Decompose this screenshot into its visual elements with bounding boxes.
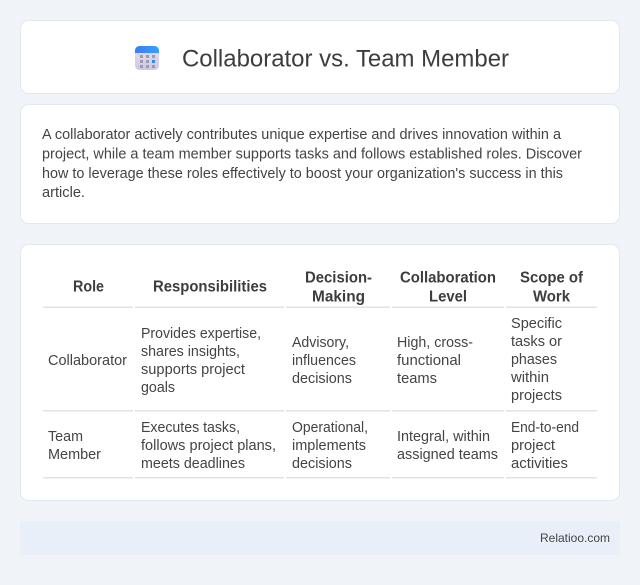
table row: team member: implements [292,438,366,454]
table row: collaborator: within [510,370,549,386]
text block: introduction paragraph: how to leverage these roles effectively to boost your organization's success in this [42,166,563,182]
table row: team member: End-to-end [511,420,579,436]
table header row: Scope of [520,270,584,286]
panel: comparison table [20,244,620,500]
title: Collaborator vs. Team Member [182,46,509,72]
table header row: Collaboration [400,270,496,286]
table row: collaborator: phases [511,352,557,368]
table row: team member: Member [48,447,101,463]
table row: collaborator: goals [141,380,175,396]
table row: collaborator: Collaborator [48,353,127,369]
footer bar [20,521,620,555]
table row: team member: meets deadlines [141,456,245,472]
table row: collaborator: tasks or [511,334,562,350]
table header row: Work [533,288,570,306]
table header row: Level [429,288,467,306]
table row: collaborator: teams [397,371,437,387]
table row: collaborator: functional [397,353,461,369]
icon: calendar [135,46,159,70]
table row: team member: follows project plans, [141,438,276,454]
table row: collaborator: influences [292,353,356,369]
table row: collaborator: Advisory, [292,335,349,351]
table row: collaborator: supports project [141,362,245,378]
table row: collaborator [48,316,562,404]
table header row: Responsibilities [153,278,267,296]
text block: introduction paragraph: article. [42,185,85,201]
table row: collaborator: High, cross- [397,335,473,351]
table row: team member: Executes tasks, [141,420,240,436]
table header row: Role [73,278,104,296]
table header row: Decision- [305,270,372,286]
panel: introduction [20,104,620,224]
table header row [73,270,584,306]
footer source text: Relatioo.com [540,531,610,545]
table row: team member: activities [511,456,568,472]
table row: team member: Integral, within [397,429,490,445]
table row: team member [48,420,579,472]
table row: collaborator: Specific [511,316,562,332]
table row: team member: decisions [292,456,352,472]
table row: team member: Operational, [292,420,368,436]
table row: collaborator: decisions [292,371,352,387]
table row: team member: assigned teams [397,447,498,463]
table header row: Making [312,288,365,306]
table row: collaborator: shares insights, [141,344,240,360]
panel: title header [20,20,620,94]
text block: introduction paragraph: A collaborator actively contributes unique expertise and drives innovation within a [42,127,562,143]
table row: collaborator: projects [511,388,562,404]
text block: introduction paragraph [42,127,582,201]
table row: collaborator: Provides expertise, [141,326,261,342]
table row: team member: project [511,438,555,454]
text block: introduction paragraph: project, while a team member supports tasks and follows established roles. Discover [42,146,582,162]
table row: team member: Team [48,429,83,445]
